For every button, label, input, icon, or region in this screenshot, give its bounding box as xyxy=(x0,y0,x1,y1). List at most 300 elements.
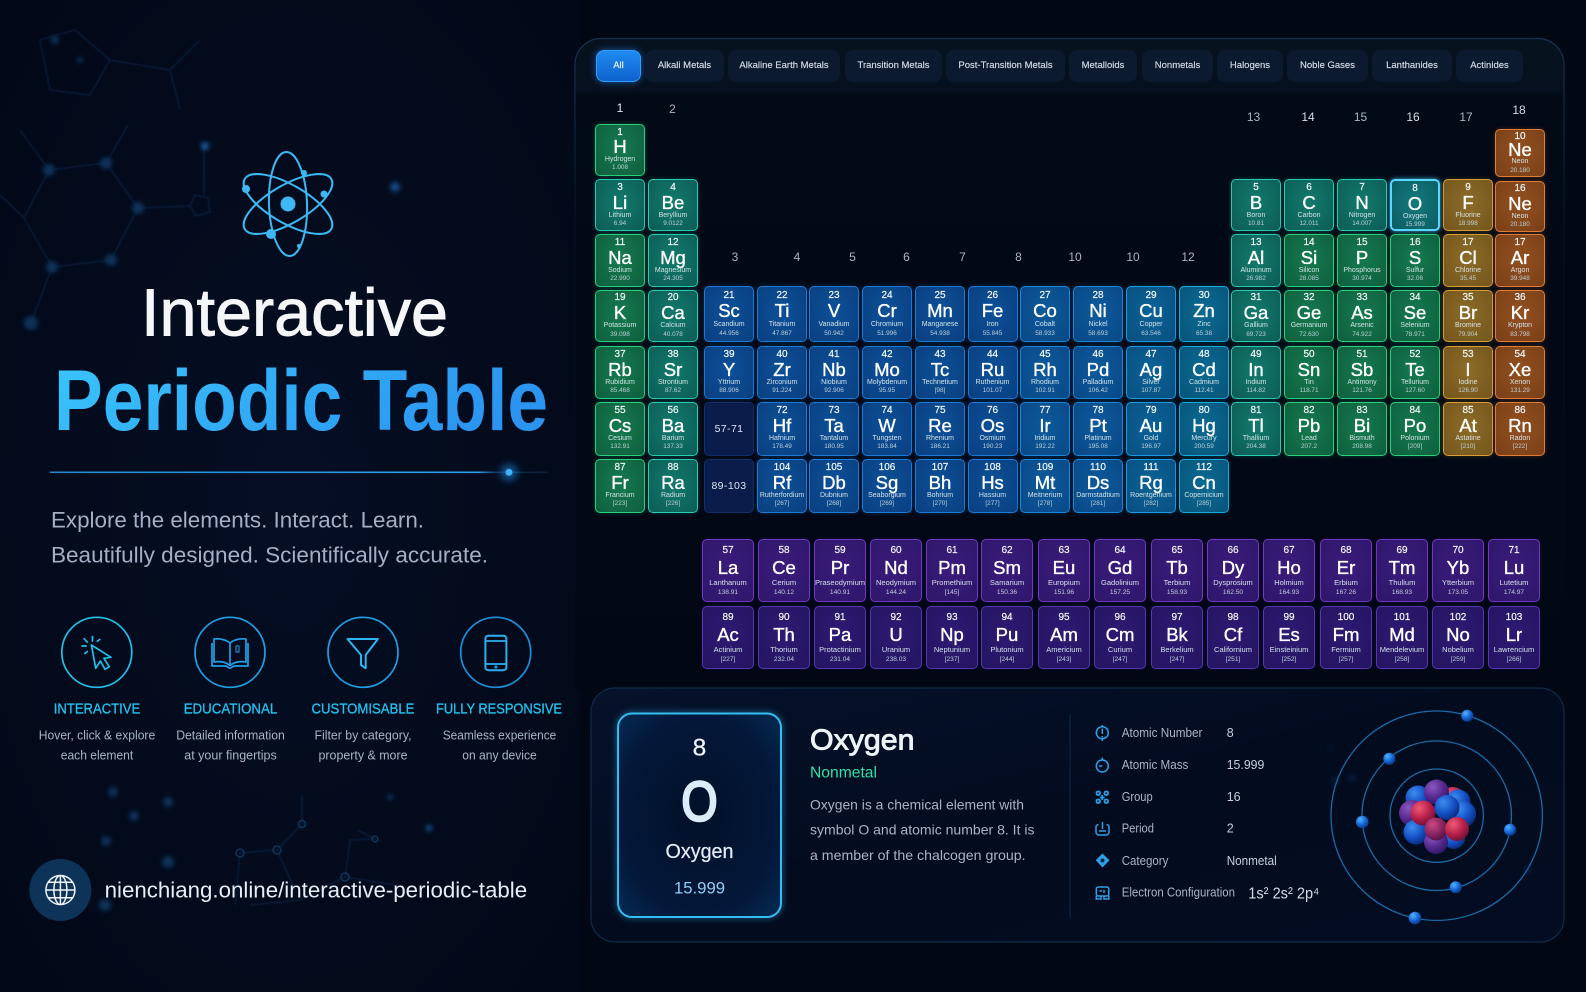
element: Hs: Hassium xyxy=(979,492,1006,498)
element: La xyxy=(702,539,754,602)
element: Ag: Silver xyxy=(1142,378,1160,386)
element: Nd: 144.24 xyxy=(886,588,906,596)
icon: open book xyxy=(195,617,265,687)
element: Md: Md xyxy=(1389,624,1415,644)
element: Na: 11 xyxy=(615,236,625,248)
element: Mn xyxy=(915,286,965,342)
element: Cf: Cf xyxy=(1224,624,1242,644)
element: Sm: 150.36 xyxy=(997,588,1017,596)
feature: customisable xyxy=(312,617,414,762)
feature: educational: EDUCATIONAL xyxy=(184,700,277,717)
element: Ni: 28 xyxy=(1092,290,1104,300)
element category: Nonmetal xyxy=(810,764,877,781)
element: H xyxy=(595,124,645,176)
element: Yb xyxy=(1432,539,1484,602)
element: Sc: Scandium xyxy=(713,320,745,328)
group number labels: 15 xyxy=(1354,110,1367,124)
element: Zr xyxy=(757,346,807,399)
filter tabs xyxy=(590,44,1523,88)
element: Md: 101 xyxy=(1394,612,1410,622)
element: Cn: Copernicium xyxy=(1184,492,1224,498)
element: Cn xyxy=(1179,459,1229,513)
element: Ne (top): Neon xyxy=(1512,158,1528,165)
property: category: Nonmetal xyxy=(1227,854,1277,868)
property: electron configuration xyxy=(1096,886,1319,902)
element: Ac: [227] xyxy=(721,656,735,662)
feature: fully responsive: on any device xyxy=(462,747,537,762)
element: Po xyxy=(1390,402,1440,456)
element: In xyxy=(1231,346,1281,399)
element: Te xyxy=(1390,346,1440,399)
element: Pd xyxy=(1073,346,1123,399)
element: V xyxy=(809,286,859,342)
element: Lu: Lu xyxy=(1504,556,1524,578)
element: Tl xyxy=(1231,402,1281,456)
element: Se: 34 xyxy=(1409,292,1421,303)
tab: Alkaline Earth Metals xyxy=(728,50,840,82)
element: Bh: 107 xyxy=(932,462,948,472)
icon: grid nodes xyxy=(1096,792,1108,803)
selected element tile: oxygen: 15.999 xyxy=(674,880,725,898)
element: Pr: 59 xyxy=(834,544,846,556)
element: Pu: 94 xyxy=(1001,612,1013,622)
element: Cs: Cesium xyxy=(608,434,632,442)
element: Dy: 66 xyxy=(1227,544,1239,556)
element: Tb: Tb xyxy=(1166,556,1188,578)
property: group: 16 xyxy=(1227,790,1241,804)
element: S: 16 xyxy=(1409,236,1421,248)
element: Cf: Californium xyxy=(1214,644,1252,654)
element: Ti: 22 xyxy=(776,290,788,300)
tab: Lanthanides xyxy=(1372,50,1452,82)
property: atomic number: Atomic Number xyxy=(1122,726,1202,740)
element: Es: 99 xyxy=(1283,612,1295,622)
element: Co: 27 xyxy=(1039,290,1051,300)
feature: interactive: Hover, click & explore xyxy=(39,727,155,742)
selected element tile: oxygen: 8 xyxy=(693,734,706,762)
element: Cs: Cs xyxy=(609,414,631,436)
element: V: Vanadium xyxy=(818,320,850,328)
element: Rh: 45 xyxy=(1039,348,1051,360)
element: K: K xyxy=(614,302,626,322)
element: Lu: 174.97 xyxy=(1504,588,1524,596)
element: Hf: 72 xyxy=(776,404,788,416)
tab: Actinides xyxy=(1456,50,1523,82)
element: At: 85 xyxy=(1462,404,1474,416)
element: O (selected): O xyxy=(1408,192,1422,214)
element: Be: 9.0122 xyxy=(663,220,683,227)
element: Au: 79 xyxy=(1145,404,1157,416)
element: Ra: Radium xyxy=(661,492,685,498)
element: Hs: [277] xyxy=(985,500,1000,507)
element: Br: Bromine xyxy=(1455,322,1481,328)
icon: funnel filter xyxy=(328,617,398,687)
element: N xyxy=(1337,179,1387,231)
element: Os: Osmium xyxy=(979,434,1006,442)
element: Cf: [251] xyxy=(1226,656,1240,662)
element: Fm: [257] xyxy=(1339,656,1353,662)
element: Xe: 54 xyxy=(1514,348,1526,360)
element: Dy: Dy xyxy=(1222,556,1244,578)
element: Rn xyxy=(1495,402,1545,456)
element: No: No xyxy=(1446,624,1470,644)
element: As xyxy=(1337,290,1387,342)
tab: Transition Metals xyxy=(845,50,942,82)
element: Rh: 102.91 xyxy=(1035,387,1055,394)
element: Xe xyxy=(1495,346,1545,399)
element: Lu xyxy=(1488,539,1540,602)
element: N: 7 xyxy=(1359,182,1365,192)
element: H: H xyxy=(613,136,627,156)
element: Ce xyxy=(758,539,810,602)
element: U xyxy=(870,606,922,669)
element: Hg: Mercury xyxy=(1191,434,1217,442)
element: W: Tungsten xyxy=(873,434,901,442)
element: B: B xyxy=(1250,192,1262,212)
element: Er: Erbium xyxy=(1334,578,1358,586)
element: Pd: 46 xyxy=(1092,348,1104,360)
element: Cr: Chromium xyxy=(871,320,903,328)
element: Mg: Magnesium xyxy=(655,266,691,274)
element: I: 126.90 xyxy=(1458,387,1478,394)
element: Ne: Ne xyxy=(1508,193,1532,214)
element: Cr: Cr xyxy=(877,300,897,320)
element: U: 92 xyxy=(890,612,902,622)
element: N: N xyxy=(1355,192,1369,212)
element: Cu: 29 xyxy=(1145,290,1157,300)
element: Fe: Iron xyxy=(986,320,999,328)
property: category: Category xyxy=(1122,854,1169,868)
element: I xyxy=(1443,346,1493,399)
element: Ds: [281] xyxy=(1091,500,1105,507)
element: Zr: Zirconium xyxy=(767,378,797,386)
element: Sb xyxy=(1337,346,1387,399)
property: period: 2 xyxy=(1227,822,1234,836)
property: atomic mass xyxy=(1096,758,1264,772)
element: Ca: Ca xyxy=(661,302,685,322)
element: Tb xyxy=(1151,539,1203,602)
element: Gd xyxy=(1094,539,1146,602)
element: Cm: Cm xyxy=(1106,624,1134,644)
electrons xyxy=(1356,710,1516,924)
element: Po: 84 xyxy=(1409,404,1421,416)
element: Lu: 71 xyxy=(1508,544,1520,556)
element: Cl xyxy=(1443,234,1493,287)
element: Ag: Ag xyxy=(1140,358,1162,380)
element: Er: Er xyxy=(1337,556,1355,578)
element: Pb xyxy=(1284,402,1334,456)
element: Pb: 82 xyxy=(1303,404,1315,416)
element: B: 5 xyxy=(1253,182,1259,192)
element: Gd: Gd xyxy=(1108,556,1132,578)
icon: globe badge xyxy=(29,859,91,921)
element: Mo: Molybdenum xyxy=(867,378,907,386)
element: Yb: Yb xyxy=(1447,556,1469,578)
element: Ho: Ho xyxy=(1277,556,1301,578)
element: Pa: 91 xyxy=(834,612,846,622)
element: Tc: Technetium xyxy=(922,378,958,386)
element: Tb: 65 xyxy=(1171,544,1183,556)
element: Ba: 56 xyxy=(667,404,679,416)
element: Pr xyxy=(814,539,866,602)
element: Ga xyxy=(1231,290,1281,342)
element: Tl: 81 xyxy=(1250,404,1262,416)
element: Sm: Samarium xyxy=(990,578,1024,586)
element: Er: 167.26 xyxy=(1336,588,1356,596)
element: V: V xyxy=(828,300,840,320)
element: P: Phosphorus xyxy=(1343,266,1381,274)
element: Na: Na xyxy=(608,246,632,268)
element: Po: Po xyxy=(1404,414,1426,436)
feature: educational: Detailed information xyxy=(176,727,285,742)
element: Pm: 61 xyxy=(946,544,958,556)
element: Rh: Rh xyxy=(1033,358,1057,380)
group number labels: 18 xyxy=(1512,103,1526,117)
element: N: 14.007 xyxy=(1352,220,1372,227)
element: As: 33 xyxy=(1356,292,1368,303)
element: Ar: Ar xyxy=(1511,246,1529,268)
element: Ni: Nickel xyxy=(1088,320,1108,328)
property: category xyxy=(1096,854,1277,868)
element: Fm xyxy=(1320,606,1372,669)
element: P: P xyxy=(1356,246,1368,268)
tab: Halogens xyxy=(1217,50,1283,82)
placeholder: actinides 89-103: 89-103 xyxy=(711,480,747,492)
element: Re: 75 xyxy=(934,404,946,416)
element: Ir xyxy=(1020,402,1070,456)
element: Pt: Platinum xyxy=(1084,434,1112,442)
group number labels: 5 xyxy=(849,250,856,264)
element: Sm: Sm xyxy=(993,556,1021,578)
element: Na: 22.990 xyxy=(610,275,630,282)
element: Ni: 58.693 xyxy=(1088,330,1108,336)
placeholder: lanthanides 57-71 xyxy=(704,402,754,456)
element: Cn: [285] xyxy=(1197,500,1211,507)
element: Md xyxy=(1376,606,1428,669)
group number labels: 14 xyxy=(1301,110,1315,124)
element: C: 6 xyxy=(1306,182,1312,192)
element: Pa xyxy=(814,606,866,669)
element: Hs xyxy=(968,459,1018,513)
element: Re: 186.21 xyxy=(930,443,950,450)
element: Es: Einsteinium xyxy=(1270,644,1308,654)
element: Nb: Niobium xyxy=(821,378,847,386)
element: S: 32.06 xyxy=(1407,275,1423,282)
element: Ne: 16 xyxy=(1514,183,1526,194)
element: Gd: Gadolinium xyxy=(1101,578,1139,586)
tab: All xyxy=(596,50,641,82)
element: Pb: Lead xyxy=(1301,434,1317,442)
element: At: [210] xyxy=(1461,443,1475,450)
element: Mg: 12 xyxy=(667,236,679,248)
group number labels: 10 xyxy=(1068,250,1082,264)
selected element tile: oxygen: Oxygen xyxy=(666,841,734,863)
element: In: In xyxy=(1248,358,1264,380)
element: Cd xyxy=(1179,346,1229,399)
element: Os: 190.23 xyxy=(983,443,1002,450)
element: Db: Dubnium xyxy=(820,492,848,498)
element: Sn xyxy=(1284,346,1334,399)
element: Ar: 39.948 xyxy=(1510,275,1530,282)
element: Cf: 98 xyxy=(1227,612,1239,622)
element: Pt xyxy=(1073,402,1123,456)
tab: Post-Transition Metals xyxy=(946,50,1065,82)
atom model illustration xyxy=(1328,710,1542,924)
element: Ce: Cerium xyxy=(772,578,796,586)
element: Hg: 200.59 xyxy=(1194,443,1214,450)
element: Bh: [270] xyxy=(933,500,947,507)
element: La: 57 xyxy=(722,544,734,556)
element description: Oxygen is a chemical element with xyxy=(810,796,1024,812)
element: Rf: [267] xyxy=(775,500,789,507)
element: Re xyxy=(915,402,965,456)
element: Zr: Zr xyxy=(773,358,791,380)
icon: circuit box xyxy=(1096,887,1109,899)
element: Br: Br xyxy=(1459,302,1477,322)
element: Nd: 60 xyxy=(890,544,902,556)
element: In: 114.82 xyxy=(1246,387,1266,394)
element: Er xyxy=(1320,539,1372,602)
icon: stopwatch xyxy=(1096,758,1108,772)
element: Cm: [247] xyxy=(1113,656,1127,662)
group number labels: 2 xyxy=(669,102,676,116)
element: Ca: 20 xyxy=(667,292,679,303)
feature: customisable: property & more xyxy=(318,747,408,762)
element: Si: 14 xyxy=(1303,236,1315,248)
element: Al: Al xyxy=(1248,246,1264,268)
element: Ba: 137.33 xyxy=(663,443,683,450)
element: Sn: 118.71 xyxy=(1299,387,1319,394)
element: Au xyxy=(1126,402,1176,456)
element: Tm: 69 xyxy=(1396,544,1408,556)
element: Pb: 207.2 xyxy=(1301,443,1317,450)
element: K: 19 xyxy=(614,292,626,303)
panel: element detail card xyxy=(590,687,1565,943)
element: Th: Thorium xyxy=(770,644,798,654)
element: I: 53 xyxy=(1462,348,1474,360)
element: Np: Neptunium xyxy=(934,644,970,654)
group number labels: 1 xyxy=(617,101,623,115)
element: Ca: Calcium xyxy=(660,322,686,328)
element: Fm: 100 xyxy=(1338,612,1354,622)
element: Hf: 178.49 xyxy=(772,443,792,450)
element: S: Sulfur xyxy=(1406,266,1424,274)
element: Y: 39 xyxy=(723,348,735,360)
element: Se xyxy=(1390,290,1440,342)
element: Pu: Pu xyxy=(996,624,1018,644)
element: Fr: 87 xyxy=(614,462,626,472)
element: Bk: Berkelium xyxy=(1160,644,1194,654)
element: Pu: Plutonium xyxy=(990,644,1024,654)
element: Es: [252] xyxy=(1282,656,1296,662)
element: In: 49 xyxy=(1250,348,1262,360)
element: F: F xyxy=(1462,192,1474,212)
element: Sc: 21 xyxy=(723,290,735,300)
element: Al: 13 xyxy=(1250,236,1262,248)
element: Rf xyxy=(757,459,807,513)
tab: Nonmetals: Nonmetals xyxy=(1155,60,1200,71)
element: Cd: 48 xyxy=(1198,348,1210,360)
element: Sn: Tin xyxy=(1304,378,1314,386)
element: Bh: Bohrium xyxy=(927,492,953,498)
element: Fe xyxy=(968,286,1018,342)
element description: a member of the chalcogen group. xyxy=(810,847,1026,863)
element: Bi xyxy=(1337,402,1387,456)
element: Bh: Bh xyxy=(929,472,951,492)
element: Ir: Iridium xyxy=(1034,434,1056,442)
element: Re: Rhenium xyxy=(926,434,954,442)
element: Mo: 42 xyxy=(881,348,893,360)
element: Ra xyxy=(648,459,698,513)
property: electron configuration: Electron Configuration xyxy=(1122,886,1235,900)
element: Cm: 96 xyxy=(1114,612,1126,622)
element: Zn: Zinc xyxy=(1197,320,1211,328)
element: No: 102 xyxy=(1450,612,1466,622)
element: S xyxy=(1390,234,1440,287)
tab: Metalloids: Metalloids xyxy=(1082,60,1124,71)
element: Na xyxy=(595,234,645,287)
element: P: 15 xyxy=(1356,236,1368,248)
property: electron configuration: 1s² 2s² 2p⁴ xyxy=(1248,886,1319,902)
element: Ds: 110 xyxy=(1090,462,1106,472)
element: Fe: 26 xyxy=(987,290,998,300)
element: Sr xyxy=(648,346,698,399)
element: Se: Se xyxy=(1404,302,1426,322)
element: Pd: 106.42 xyxy=(1088,387,1108,394)
icon: power box xyxy=(1096,822,1109,835)
element: Cl: Cl xyxy=(1459,246,1477,268)
element: W: 74 xyxy=(881,404,893,416)
element: Ar: Argon xyxy=(1511,266,1529,274)
element: Ga: Gallium xyxy=(1244,322,1268,328)
element: Ac: 89 xyxy=(722,612,734,622)
tab: Transition Metals: Transition Metals xyxy=(858,60,929,71)
element: I: I xyxy=(1465,358,1471,380)
element: Ac: Actinium xyxy=(714,644,742,654)
element: Eu xyxy=(1038,539,1090,602)
element: Rb xyxy=(595,346,645,399)
element: At xyxy=(1443,402,1493,456)
element: K xyxy=(595,290,645,342)
feature: educational: at your fingertips xyxy=(184,747,277,762)
element: Cl: 17 xyxy=(1462,236,1474,248)
tab: Metalloids xyxy=(1069,50,1137,82)
tab: Halogens: Halogens xyxy=(1230,60,1270,71)
tab: Actinides: Actinides xyxy=(1470,60,1509,71)
nucleus xyxy=(1399,780,1476,854)
property: period: Period xyxy=(1122,822,1154,836)
element: Fr xyxy=(595,459,645,513)
element: Hf: Hf xyxy=(773,414,791,436)
element: Md: [258] xyxy=(1395,656,1409,662)
element: Lu: Lutetium xyxy=(1500,578,1528,586)
element: Ca: 40.078 xyxy=(663,330,683,338)
element: Lr: Lr xyxy=(1506,624,1522,644)
element: Fe: 55.845 xyxy=(983,330,1002,336)
element: Be xyxy=(648,179,698,231)
element: Pu xyxy=(981,606,1033,669)
element: Nd xyxy=(870,539,922,602)
element: Nd: Nd xyxy=(884,556,908,578)
element: Ru xyxy=(968,346,1018,399)
element: Ge: 72.630 xyxy=(1299,330,1319,338)
element: Ne (top): 10 xyxy=(1514,131,1526,142)
element: U: Uranium xyxy=(882,644,910,654)
tab: Alkali Metals xyxy=(645,50,724,82)
tab: Lanthanides: Lanthanides xyxy=(1386,60,1438,71)
element: Ds: Ds xyxy=(1087,472,1109,492)
element: Ne xyxy=(1495,181,1545,232)
